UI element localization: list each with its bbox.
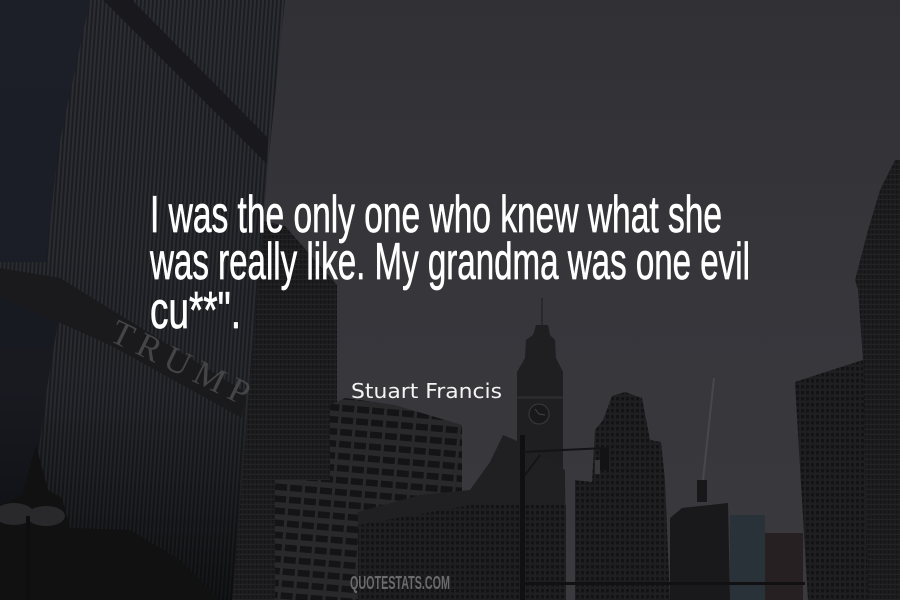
quote text: cu**". <box>150 282 241 340</box>
watermark: QUOTESTATS.COM <box>350 573 450 593</box>
background: lower ornate building <box>358 435 566 600</box>
tower setback band upper <box>103 0 268 164</box>
background: crane mast <box>697 378 714 502</box>
clock face <box>529 404 549 424</box>
background: street lamp <box>520 435 805 600</box>
background: gothic tower <box>575 392 670 600</box>
background: rear building beside tower <box>230 218 337 600</box>
background: trees bottom left <box>0 445 220 600</box>
quote text <box>149 186 750 340</box>
background: low buildings right <box>670 503 803 600</box>
tower setback band lower <box>0 268 245 418</box>
sign: Trump lettering: TRUMP <box>104 312 256 413</box>
background: right tall building <box>795 160 900 600</box>
background: mid-rise grid building <box>275 398 462 600</box>
background: clock tower <box>517 298 563 600</box>
background: left glass tower <box>0 0 285 600</box>
author name: Stuart Francis <box>351 379 502 403</box>
